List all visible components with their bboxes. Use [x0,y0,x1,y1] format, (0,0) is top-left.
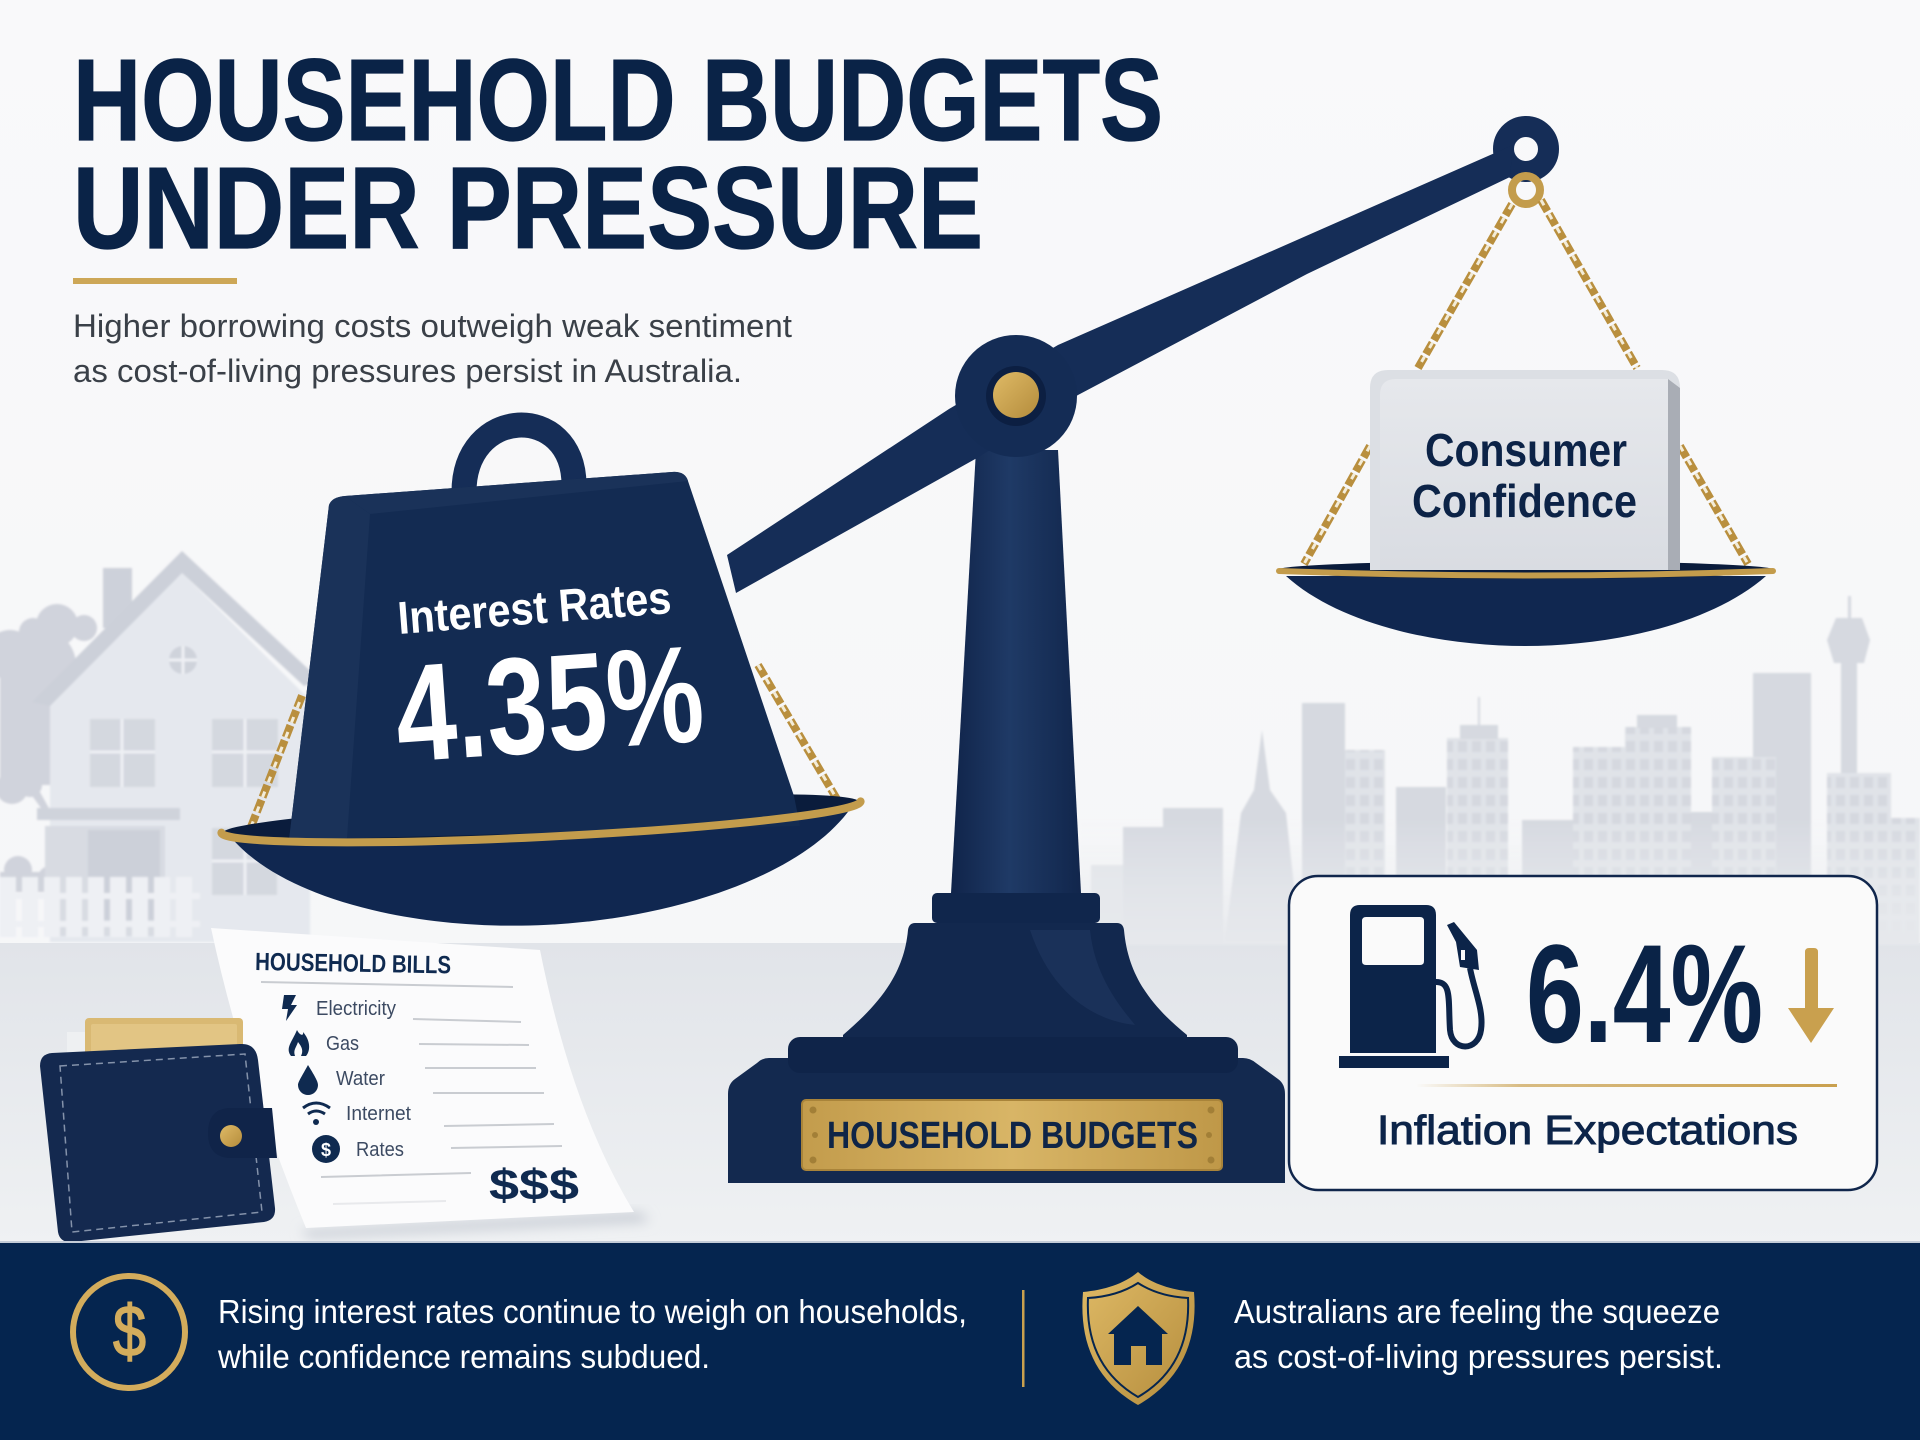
takeaway: households: Rising interest rates continue to weigh on households, [218,1293,967,1330]
bill items: Rates [356,1139,404,1161]
weight label [390,571,708,792]
inflation card: 6.4% [1526,915,1763,1072]
bill items: Electricity [316,998,396,1020]
right chains [1304,176,1748,564]
title: UNDER PRESSURE [73,143,983,273]
flared base [843,923,1187,1040]
wallet [40,1018,277,1242]
takeaway: squeeze: Australians are feeling the squeeze [1234,1293,1720,1330]
nameplate [802,1100,1222,1170]
takeaway: squeeze [1234,1293,1723,1375]
skyline backdrop [1080,596,1920,945]
icon: house shield [1082,1272,1195,1405]
wall [50,573,310,942]
fence [0,877,200,937]
consumer confidence block [1370,370,1680,570]
roof [32,551,320,706]
weight handle [464,425,574,495]
icon: dollar coin: $ [113,1292,146,1372]
title [73,35,1163,273]
bill icons [282,995,340,1163]
bill items [316,998,411,1161]
left pan and weight [221,425,864,940]
household bills sheet: $$$ [489,1161,579,1210]
inflation card: Inflation Expectations [1377,1107,1798,1153]
title: HOUSEHOLD BUDGETS [73,35,1163,165]
bill items: Internet [346,1103,411,1125]
chimney [103,568,132,628]
household bills sheet: HOUSEHOLD BILLS [255,948,451,979]
gold rim [221,801,862,853]
bottom band [0,1241,1920,1440]
household bills sheet: $ [321,1140,331,1160]
subtitle: as cost-of-living pressures persist in Australia. [73,353,742,389]
plinth [728,1058,1285,1183]
scale stand [728,450,1285,1183]
consumer confidence block: Confidence [1412,475,1637,527]
left chains [251,665,838,827]
household bills sheet [211,928,650,1238]
weight label: Interest Rates [396,571,673,644]
icon: dollar coin [73,1276,185,1388]
takeaway: households [217,1293,967,1375]
inflation card [1289,876,1877,1190]
bill items: Gas [326,1033,359,1055]
scale beam [727,145,1513,593]
house backdrop [0,551,320,942]
subtitle [73,308,792,389]
weight body [289,472,800,840]
tree [0,604,200,892]
beam end ring [1504,126,1548,172]
bill items: Water [336,1068,385,1090]
arrow: down [1788,948,1834,1043]
column [951,450,1081,893]
consumer confidence block: Consumer [1425,424,1627,476]
right pan [1277,370,1775,646]
subtitle: Higher borrowing costs outweigh weak sentiment [73,308,792,344]
round window [169,646,197,674]
windows [90,719,155,787]
takeaway: squeeze: as cost-of-living pressures persist. [1234,1338,1723,1375]
takeaway: households: while confidence remains subdued. [217,1338,710,1375]
weight label: 4.35% [390,617,708,792]
ground plane [0,943,1920,1243]
pivot hub [955,335,1077,457]
gold accent rule [73,278,237,284]
porch [37,808,180,820]
nameplate: HOUSEHOLD BUDGETS [827,1115,1198,1157]
icon: fuel pump [1339,905,1482,1068]
clasp [208,1108,277,1158]
